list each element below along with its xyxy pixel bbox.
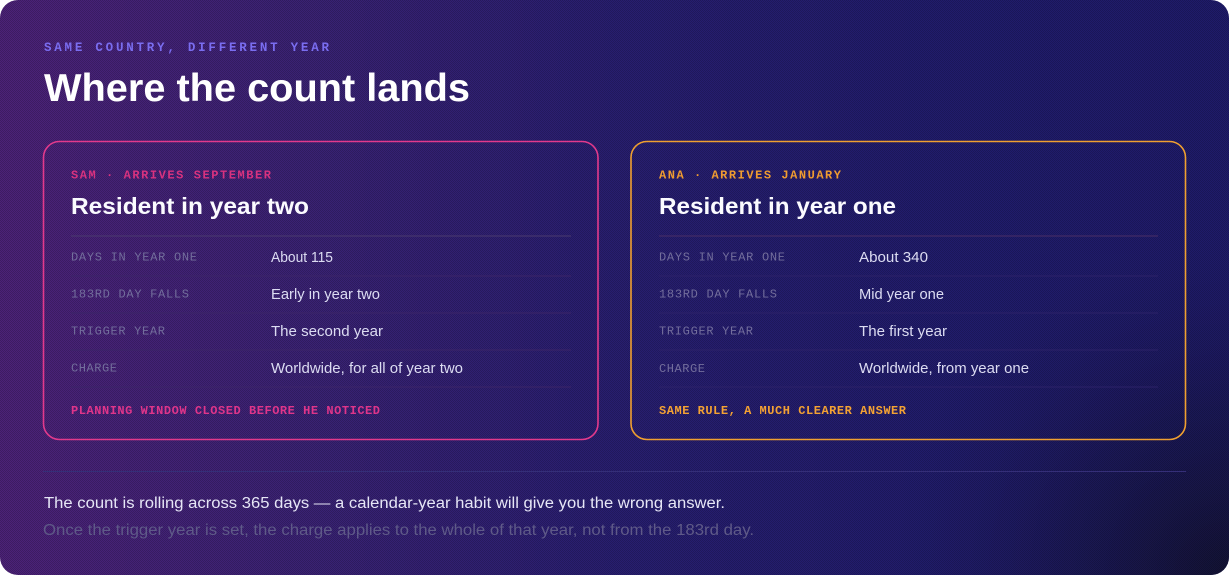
- Sam heading: Resident in year two: [71, 193, 309, 219]
- Sam takeaway: PLANNING WINDOW CLOSED BEFORE HE NOTICED: [71, 404, 380, 418]
- Ana table: 183RD DAY FALLS: [659, 288, 777, 302]
- Ana table: Mid year one: [859, 287, 944, 303]
- Ana table: About 340: [859, 250, 928, 266]
- Ana takeaway: SAME RULE, A MUCH CLEARER ANSWER: [659, 404, 907, 418]
- footer: [43, 472, 1186, 539]
- Ana table: Worldwide, from year one: [859, 361, 1029, 377]
- Sam table: The second year: [271, 324, 383, 340]
- Ana table: TRIGGER YEAR: [659, 324, 753, 338]
- Sam table: Worldwide, for all of year two: [271, 361, 463, 377]
- Sam table: [71, 236, 571, 387]
- Ana table: DAYS IN YEAR ONE: [659, 250, 785, 264]
- Sam table: About 115: [271, 250, 333, 266]
- footer secondary line: Once the trigger year is set, the charge applies to the whole of that year, not from the 183rd day.: [43, 522, 754, 539]
- Sam table: CHARGE: [71, 362, 117, 376]
- Ana table: CHARGE: [659, 362, 705, 376]
- eyebrow: SAME COUNTRY, DIFFERENT YEAR: [44, 41, 329, 55]
- Ana table: [659, 236, 1158, 387]
- Ana table: The first year: [859, 324, 947, 340]
- footer primary line: The count is rolling across 365 days — a calendar-year habit will give you the wrong answer.: [44, 495, 725, 512]
- title: Where the count lands: [44, 67, 470, 110]
- Ana eyebrow: ANA · ARRIVES JANUARY: [659, 168, 842, 182]
- Sam table: TRIGGER YEAR: [71, 324, 165, 338]
- Sam table: Early in year two: [271, 287, 380, 303]
- panel: Sam: [44, 142, 598, 440]
- Sam table: 183RD DAY FALLS: [71, 288, 189, 302]
- Ana heading: Resident in year one: [659, 193, 896, 219]
- Sam table: DAYS IN YEAR ONE: [71, 250, 197, 264]
- panel: Ana: [631, 142, 1186, 440]
- Sam eyebrow: SAM · ARRIVES SEPTEMBER: [71, 168, 272, 182]
